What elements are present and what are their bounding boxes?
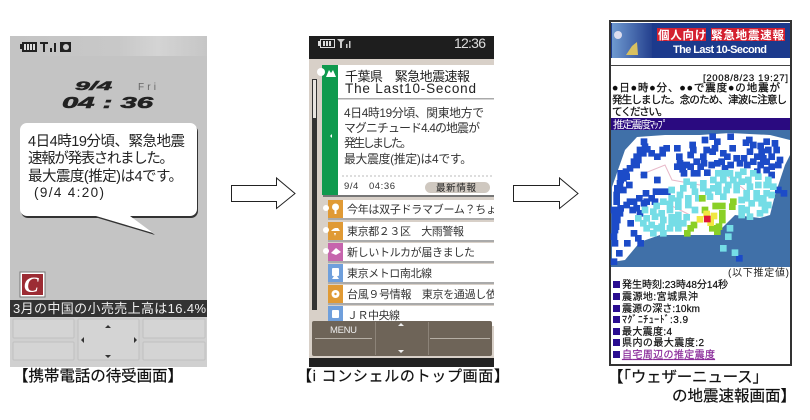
bottom bar [309,358,494,367]
earthquake details list: 震源地:宮城県沖 [622,290,698,303]
alert text: てください。 [612,106,668,118]
list row: toruca [323,243,494,263]
seismic intensity map [611,130,790,267]
list row: toruca: 新しいトルカが届きました [347,245,475,259]
earthquake details list: 県内の最大震度:2 [622,336,704,349]
alert text: ●日●時●分、●●で震度●の地震が [612,81,780,94]
speech bubble: 4日4時19分頃、緊急地震 [28,133,185,150]
card: earthquake alert: マグニチュード4.4の地震が [344,121,480,135]
list row: drama [323,200,497,220]
list row: JR line: ＪＲ中央線 [347,309,400,322]
clock date: 9/4 [75,79,113,93]
list row: typhoon: 台風９号情報 東京を通過し依 [347,287,497,301]
card: earthquake alert: 千葉県 緊急地震速報 [345,69,470,84]
menu overlay [312,321,492,356]
speech bubble: 最大震度(推定)は4です。 [28,168,183,185]
card: earthquake alert [317,65,494,197]
speech bubble: 速報が発表されました。 [28,150,174,167]
clock date [62,79,156,112]
arrow: second [514,178,578,208]
list row: subway [328,264,494,284]
card: earthquake alert: 発生しました。 [344,136,412,150]
clock date: Fri [138,82,156,93]
list row: heavy rain: 東京都２３区 大雨警報 [347,224,464,238]
card: earthquake alert: 9/4 04:36 [344,181,395,192]
card: earthquake alert: 最新情報 [436,182,476,194]
map heading [611,118,790,131]
card: earthquake alert: The Last10-Second [345,81,476,96]
caption: i-concier top screen: 【i コンシェルのトップ画面】 [297,368,509,385]
earthquake details list: 最大震度:4 [622,325,672,338]
list row: heavy rain [323,222,494,242]
clock date: 04 : 36 [62,95,153,112]
status bar [309,35,494,59]
caption: standby screen: 【携帯電話の待受画面】 [13,367,183,385]
news ticker: 3月の中国の小売売上高は16.4% [13,301,206,316]
caption: weathernews screen [608,368,796,405]
alert text [612,73,788,118]
site header: The Last 10-Second [673,44,767,56]
speech bubble: (9/4 4:20) [34,185,104,200]
alert text: 発生しました。念のため、津波に注意し [612,93,787,106]
card: earthquake alert: 最大震度(推定)は4です。 [344,152,472,166]
phone keypad [10,317,207,367]
caption: weathernews screen: 【「ウェザーニュース」 [608,368,768,386]
arrow: first [232,178,295,208]
menu overlay: MENU [330,325,357,336]
panel: standby screen phone [10,36,207,367]
estimated values note: (以下推定値) [728,266,789,279]
earthquake details list: 発生時刻:23時48分14秒 [622,278,728,291]
site header [611,23,790,58]
scrollbar [312,79,317,310]
map heading: 推定震度ﾏｯﾌﾟ [613,118,668,131]
alert text: [2008/8/23 19:27] [703,73,788,84]
card: earthquake alert: 4日4時19分頃、関東地方で [344,106,484,120]
list row: drama: 今年は双子ドラマブーム？ちょ [347,202,497,216]
earthquake details list: 震源の深さ:10km [622,302,700,315]
caption: weathernews screen: の地震速報画面】 [672,387,796,405]
speech bubble [20,123,198,235]
icon: status bar [20,42,71,52]
list row: subway: 東京メトロ南北線 [347,267,432,280]
site header: 個人向け 緊急地震速報 [658,28,784,42]
status bar: 12:36 [454,35,486,51]
list row: JR line [328,306,494,326]
panel: i-concier top screen phone [309,35,497,367]
panel: weathernews earthquake screen [610,21,791,365]
icon: red C logo [20,272,45,297]
earthquake details list: 自宅周辺の推定震度 [622,348,715,361]
icon: red C logo: C [24,272,39,297]
earthquake details list [613,278,728,361]
list row: typhoon [328,285,497,305]
earthquake details list: ﾏｸﾞﾆﾁｭｰﾄﾞ:3.9 [622,314,688,326]
